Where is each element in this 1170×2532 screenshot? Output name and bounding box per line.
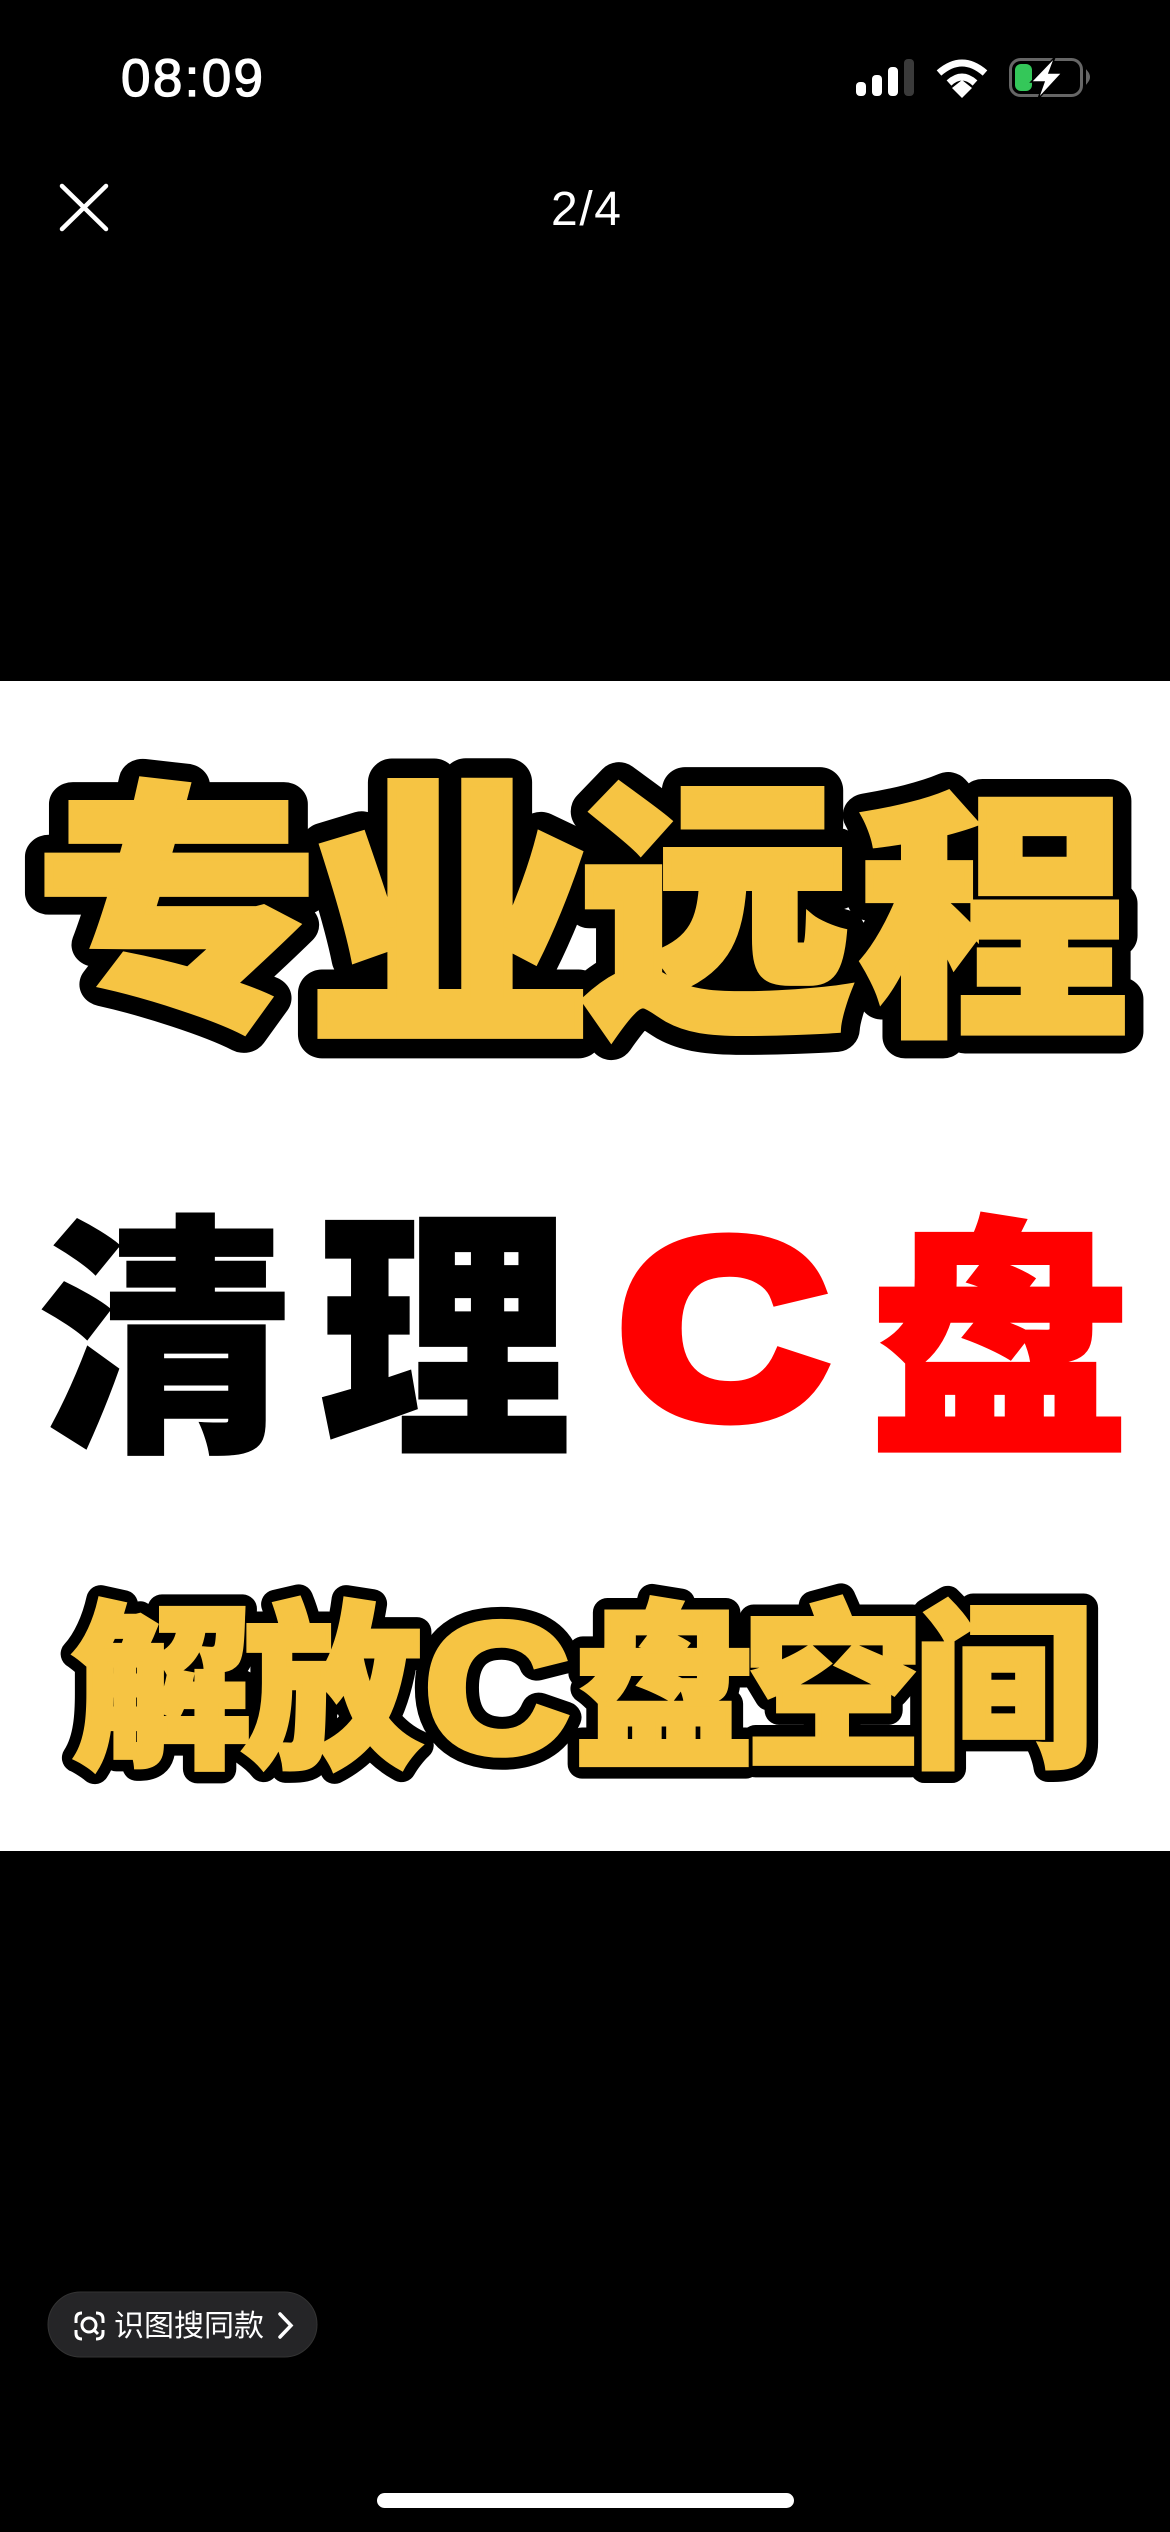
subtitle: 解放C盘空间: 盘 [575, 1591, 753, 1790]
icon: close X [62, 186, 106, 229]
subtitle: 解放C盘空间 [73, 1586, 1092, 1792]
button: visual search pill [48, 2292, 317, 2357]
subtitle: 解放C盘空间: 解 [73, 1591, 251, 1790]
icon: cellular signal [856, 59, 914, 96]
subtitle: 解放C盘空间 outline layer: 放 [243, 1591, 421, 1790]
icon: chevron [280, 2314, 291, 2337]
icon: charging battery [1010, 57, 1089, 99]
subtitle: 解放C盘空间 outline layer: 解 [73, 1591, 251, 1790]
subtitle: 解放C盘空间 outline layer: 盘 [575, 1591, 753, 1790]
title: 专业远程 outline layer: 远 [580, 762, 852, 1068]
heading: 清理C盘: C [619, 1190, 827, 1469]
title: 专业远程: 程 [860, 779, 1128, 1067]
button label: 识图搜同款 [114, 2310, 264, 2343]
subtitle: 解放C盘空间 outline layer: 间 [914, 1591, 1092, 1790]
title: 专业远程: 远 [580, 762, 852, 1068]
title: 专业远程 outline layer: 专 [36, 771, 318, 1059]
title: 专业远程 outline layer: 业 [309, 765, 591, 1080]
title: 专业远程 outline layer: 程 [860, 779, 1128, 1067]
icon: scan search [76, 2313, 103, 2339]
subtitle: 解放C盘空间 outline layer: 空 [744, 1591, 922, 1790]
icon: wifi [939, 63, 985, 98]
heading: 清理C盘: 盘 [870, 1205, 1129, 1487]
title: 专业远程: 专 [36, 771, 318, 1059]
subtitle: 解放C盘空间: C [424, 1586, 570, 1792]
title: 专业远程 [36, 762, 1128, 1080]
subtitle: 解放C盘空间 outline layer [73, 1586, 1092, 1792]
subtitle: 解放C盘空间: 放 [243, 1591, 421, 1790]
home indicator [377, 2493, 794, 2508]
subtitle: 解放C盘空间: 间 [914, 1591, 1092, 1790]
page counter: 2/4 [551, 183, 621, 236]
heading: 清理C盘 [39, 1190, 1129, 1492]
panel: white image card [0, 681, 1170, 1851]
status bar time: 08:09 [121, 49, 263, 108]
title: 专业远程 outline layer [36, 762, 1128, 1080]
title: 专业远程: 业 [309, 765, 591, 1080]
subtitle: 解放C盘空间 outline layer: C [424, 1586, 570, 1792]
heading: 清理C盘: 清 [39, 1201, 291, 1484]
heading: 清理C盘: 理 [319, 1194, 570, 1492]
subtitle: 解放C盘空间: 空 [744, 1591, 922, 1790]
